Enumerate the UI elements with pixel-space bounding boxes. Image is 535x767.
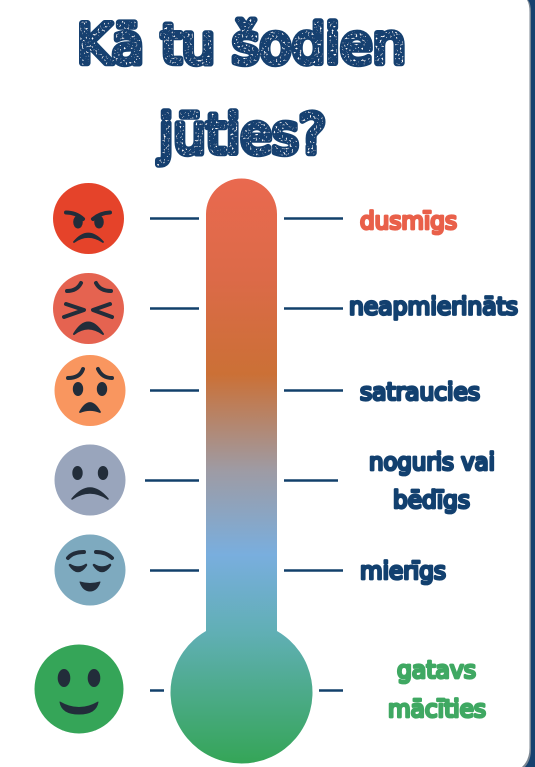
label: noguris vai bēdīgs [369,448,495,514]
label: gatavs mācīties: mācīties [388,695,486,723]
title: jūties? [158,103,326,166]
label: gatavs mācīties [388,656,486,723]
label: satraucies: satraucies [360,378,480,406]
label: dusmīgs: dusmīgs [360,207,457,235]
label: gatavs mācīties: gatavs [397,656,476,684]
icon: happy face [34,644,124,734]
title: Kā tu šodien [77,13,406,76]
tick lines [145,218,343,690]
icon: frustrated face [53,273,124,344]
icon: sad face [54,444,126,516]
icon: angry face [53,183,124,254]
icon: calm face [54,534,126,606]
thermometer [170,178,313,763]
icon: worried face [54,355,126,426]
label: noguris vai bēdīgs: bēdīgs [393,486,470,514]
title [77,13,406,166]
label: neapmierināts: neapmierināts [349,292,518,320]
label: noguris vai bēdīgs: noguris vai [369,448,495,476]
label: mierīgs: mierīgs [360,557,446,585]
